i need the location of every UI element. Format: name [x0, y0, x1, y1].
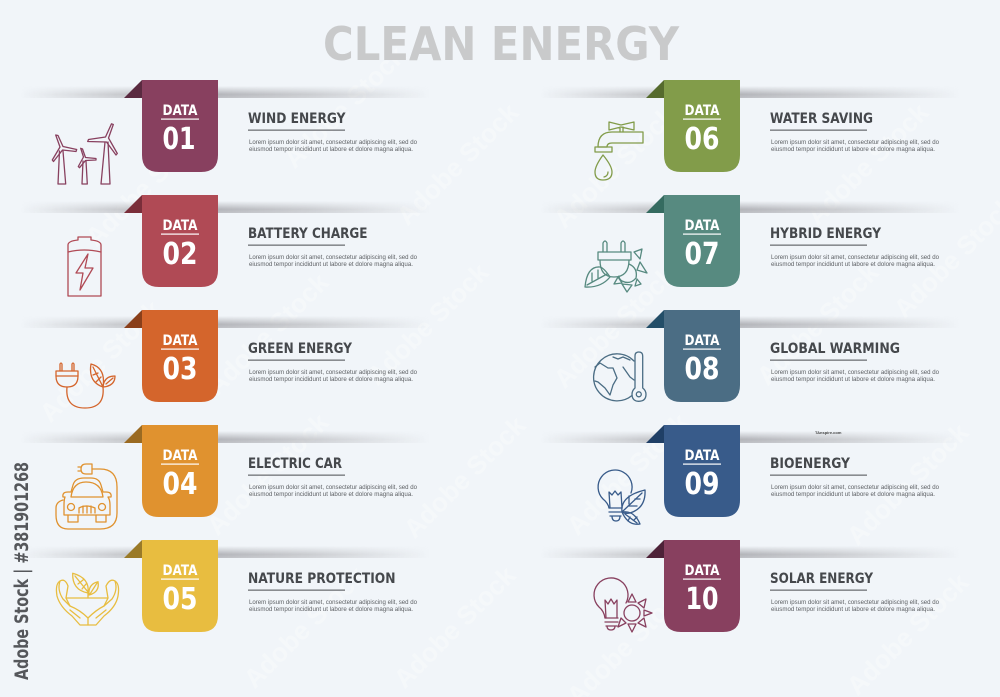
text: Adobe Stock	[398, 410, 532, 544]
panel: data 01 wind energy: 01	[162, 122, 196, 157]
panel: data 01 wind energy	[20, 80, 430, 184]
panel: data 10 solar energy: 10	[686, 582, 718, 617]
text: Adobe Stock	[388, 560, 522, 694]
panel: data 07 hybrid energy: 07	[684, 237, 720, 272]
panel: data 01 wind energy: DATA	[162, 103, 198, 119]
panel: data 03 green energy: GREEN ENERGY	[248, 341, 352, 357]
icon: battery	[68, 237, 101, 296]
panel: data 09 bioenergy: eiusmod tempor incididunt ut labore et dolore magna aliqua.	[771, 492, 935, 498]
panel: data 03 green energy: DATA	[162, 333, 198, 349]
panel: data 08 global warming: 08	[684, 352, 720, 387]
panel: data 10 solar energy	[540, 540, 960, 632]
panel: data 05 nature protection: NATURE PROTECTION	[248, 571, 396, 587]
text: Adobe Stock	[201, 267, 335, 401]
panel: data 08 global warming: DATA	[684, 333, 720, 349]
text: Adobe Stock	[561, 407, 695, 541]
panel: data 07 hybrid energy: Lorem ipsum dolor sit amet, consectetur adipiscing elit, sed do	[771, 255, 940, 261]
panel: data 07 hybrid energy: eiusmod tempor incididunt ut labore et dolore magna aliqua.	[771, 262, 935, 268]
icon: plug, leaf and sun	[585, 241, 647, 292]
panel: data 09 bioenergy	[540, 425, 960, 524]
panel: data 05 nature protection: DATA	[162, 563, 198, 579]
icon: plug and leaves	[56, 363, 115, 408]
icon: light bulb and sun	[594, 578, 652, 632]
panel: data 02 battery charge: eiusmod tempor incididunt ut labore et dolore magna aliqua.	[249, 262, 413, 268]
vertical stock id text: Adobe Stock | #381901268	[12, 462, 33, 680]
text: Adobe Stock	[841, 567, 975, 697]
panel: data 06 water saving: 06	[684, 122, 720, 157]
icon: wind turbines	[52, 124, 117, 184]
panel: data 06 water saving: WATER SAVING	[770, 111, 873, 127]
panel: data 06 water saving: eiusmod tempor incididunt ut labore et dolore magna aliqua.	[771, 147, 935, 153]
panel: data 01 wind energy: eiusmod tempor incididunt ut labore et dolore magna aliqua.	[249, 147, 413, 153]
panel: data 07 hybrid energy: DATA	[684, 218, 720, 234]
panel: data 05 nature protection	[20, 540, 430, 632]
panel: data 03 green energy	[20, 310, 430, 408]
text: Adobe Stock	[548, 260, 682, 394]
panel: data 08 global warming: Lorem ipsum dolor sit amet, consectetur adipiscing elit, sed do	[771, 370, 940, 376]
panel: data 02 battery charge: 02	[162, 237, 198, 272]
panel: data 04 electric car	[20, 425, 430, 529]
panel: data 06 water saving: Lorem ipsum dolor sit amet, consectetur adipiscing elit, sed do	[771, 140, 940, 146]
panel: data 08 global warming	[540, 310, 960, 402]
icon: earth and thermometer	[594, 352, 646, 401]
icon: light bulb and leaves	[598, 470, 645, 524]
panel: data 10 solar energy: eiusmod tempor incididunt ut labore et dolore magna aliqua.	[771, 607, 935, 613]
panel: data 03 green energy: Lorem ipsum dolor sit amet, consectetur adipiscing elit, sed do	[249, 370, 418, 376]
panel: data 10 solar energy: Lorem ipsum dolor sit amet, consectetur adipiscing elit, sed do	[771, 600, 940, 606]
panel: data 10 solar energy: SOLAR ENERGY	[770, 571, 873, 587]
title: CLEAN ENERGY	[323, 17, 680, 71]
text: Adobe Stock	[201, 407, 335, 541]
panel: data 06 water saving	[540, 80, 960, 180]
panel: data 08 global warming: GLOBAL WARMING	[770, 341, 900, 357]
panel: data 08 global warming: eiusmod tempor incididunt ut labore et dolore magna aliqua.	[771, 377, 935, 383]
panel: data 04 electric car: 04	[162, 467, 198, 502]
icon: hands holding a plant	[56, 573, 119, 625]
panel: data 07 hybrid energy	[540, 195, 960, 292]
panel: data 09 bioenergy: BIOENERGY	[770, 456, 850, 472]
panel: data 04 electric car: DATA	[162, 448, 198, 464]
panel: data 04 electric car: ELECTRIC CAR	[248, 456, 342, 472]
text: Adobe Stock	[79, 118, 213, 252]
panel: data 01 wind energy: Lorem ipsum dolor sit amet, consectetur adipiscing elit, sed do	[249, 140, 418, 146]
panel: data 04 electric car: Lorem ipsum dolor sit amet, consectetur adipiscing elit, sed do	[249, 485, 418, 491]
text: Adobe Stock	[391, 97, 525, 231]
panel: data 05 nature protection: 05	[162, 582, 198, 617]
text: Adobe Stock	[278, 40, 412, 174]
panel: data 07 hybrid energy: HYBRID ENERGY	[770, 226, 881, 242]
panel: data 06 water saving: DATA	[684, 103, 720, 119]
panel: data 04 electric car: eiusmod tempor incididunt ut labore et dolore magna aliqua.	[249, 492, 413, 498]
text: Adobe Stock	[238, 560, 372, 694]
text: Adobe Stock	[34, 294, 167, 428]
text: Adobe Stock	[751, 257, 885, 391]
panel: data 02 battery charge	[20, 195, 430, 296]
text: Adobe Stock	[361, 257, 495, 391]
panel: data 09 bioenergy: DATA	[684, 448, 720, 464]
panel: data 05 nature protection: Lorem ipsum dolor sit amet, consectetur adipiscing elit, sed do	[249, 600, 418, 606]
panel: data 02 battery charge: BATTERY CHARGE	[248, 226, 368, 242]
panel: data 10 solar energy: DATA	[684, 563, 720, 579]
panel: data 02 battery charge: Lorem ipsum dolor sit amet, consectetur adipiscing elit, sed do	[249, 255, 418, 261]
text: Adobe Stock	[841, 417, 975, 551]
icon: water tap	[595, 122, 643, 180]
panel: data 02 battery charge: DATA	[162, 218, 198, 234]
small credit text: TAnspire.com	[815, 430, 842, 435]
panel: data 05 nature protection: eiusmod tempor incididunt ut labore et dolore magna aliqua.	[249, 607, 413, 613]
text: Adobe Stock	[548, 100, 682, 234]
icon: electric car	[56, 464, 117, 529]
panel: data 09 bioenergy: 09	[684, 467, 720, 502]
text: Adobe Stock	[801, 97, 935, 231]
panel: data 09 bioenergy: Lorem ipsum dolor sit amet, consectetur adipiscing elit, sed do	[771, 485, 940, 491]
panel: data 03 green energy: eiusmod tempor incididunt ut labore et dolore magna aliqua.	[249, 377, 413, 383]
panel: data 01 wind energy: WIND ENERGY	[248, 111, 346, 127]
panel: data 03 green energy: 03	[162, 352, 198, 387]
